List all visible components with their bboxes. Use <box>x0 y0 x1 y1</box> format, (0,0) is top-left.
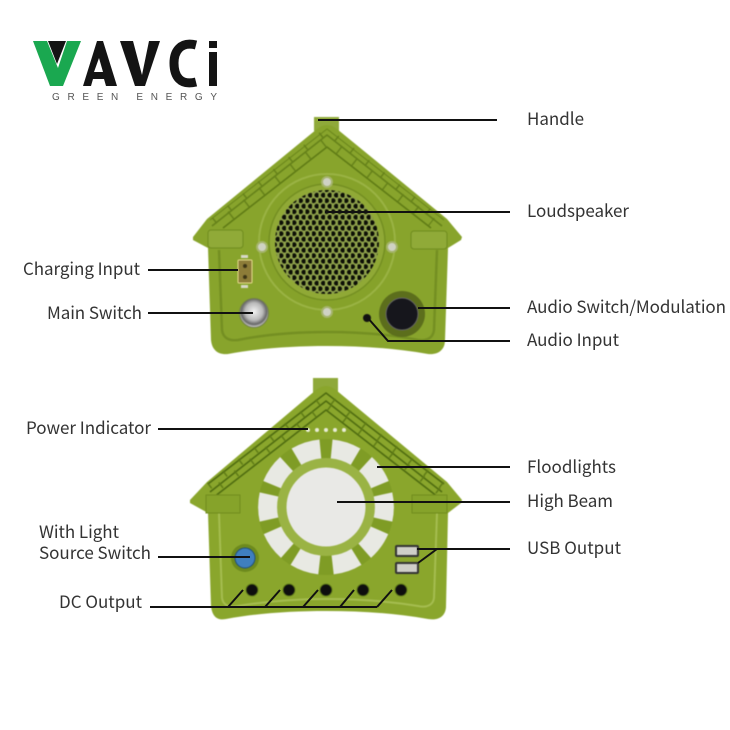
device: front view <box>193 117 462 354</box>
label: handle: Handle <box>527 105 584 130</box>
label: usb output: USB Output <box>527 534 622 559</box>
power indicator dots <box>306 428 346 432</box>
label: with light source switch <box>39 518 250 564</box>
housing <box>193 125 462 354</box>
label: main switch: Main Switch <box>47 299 142 324</box>
usb ports <box>396 546 418 573</box>
loudspeaker <box>259 174 395 310</box>
device: back view <box>190 378 462 619</box>
handle <box>314 117 339 131</box>
label: dc output <box>59 588 392 613</box>
label: audio input: Audio Input <box>527 326 620 351</box>
main switch <box>240 298 268 328</box>
knob <box>379 291 425 337</box>
logo wordmark <box>83 41 217 86</box>
label: loudspeaker: Loudspeaker <box>527 197 629 222</box>
housing <box>190 386 462 619</box>
light source switch <box>231 544 259 572</box>
handle <box>313 378 338 394</box>
label: power indicator: Power Indicator <box>26 414 151 439</box>
dc ports <box>246 584 407 596</box>
roof tiles <box>210 129 444 228</box>
roof tiles <box>208 393 444 497</box>
charging input <box>238 255 252 288</box>
label: usb output <box>417 534 622 563</box>
inner panel edge <box>219 250 437 340</box>
floodlights <box>268 448 384 566</box>
eave blocks <box>208 230 447 249</box>
high beam <box>286 468 366 546</box>
logo <box>33 41 217 103</box>
label: with light source switch: Source Switch <box>39 539 151 564</box>
audio input jack <box>363 314 371 322</box>
label: audio input <box>367 317 620 351</box>
screws <box>257 177 397 317</box>
logo tagline: GREEN ENERGY <box>52 92 217 103</box>
inner panel edge <box>219 513 437 607</box>
label: floodlights: Floodlights <box>527 453 616 478</box>
logo mark <box>33 41 81 86</box>
label: audio switch/modulation: Audio Switch/Modulation <box>527 293 726 318</box>
label: high beam: High Beam <box>527 487 613 512</box>
label: charging input: Charging Input <box>23 255 141 280</box>
label: with light source switch: With Light <box>39 518 120 543</box>
label: dc output: DC Output <box>59 588 143 613</box>
eave blocks <box>206 495 447 513</box>
